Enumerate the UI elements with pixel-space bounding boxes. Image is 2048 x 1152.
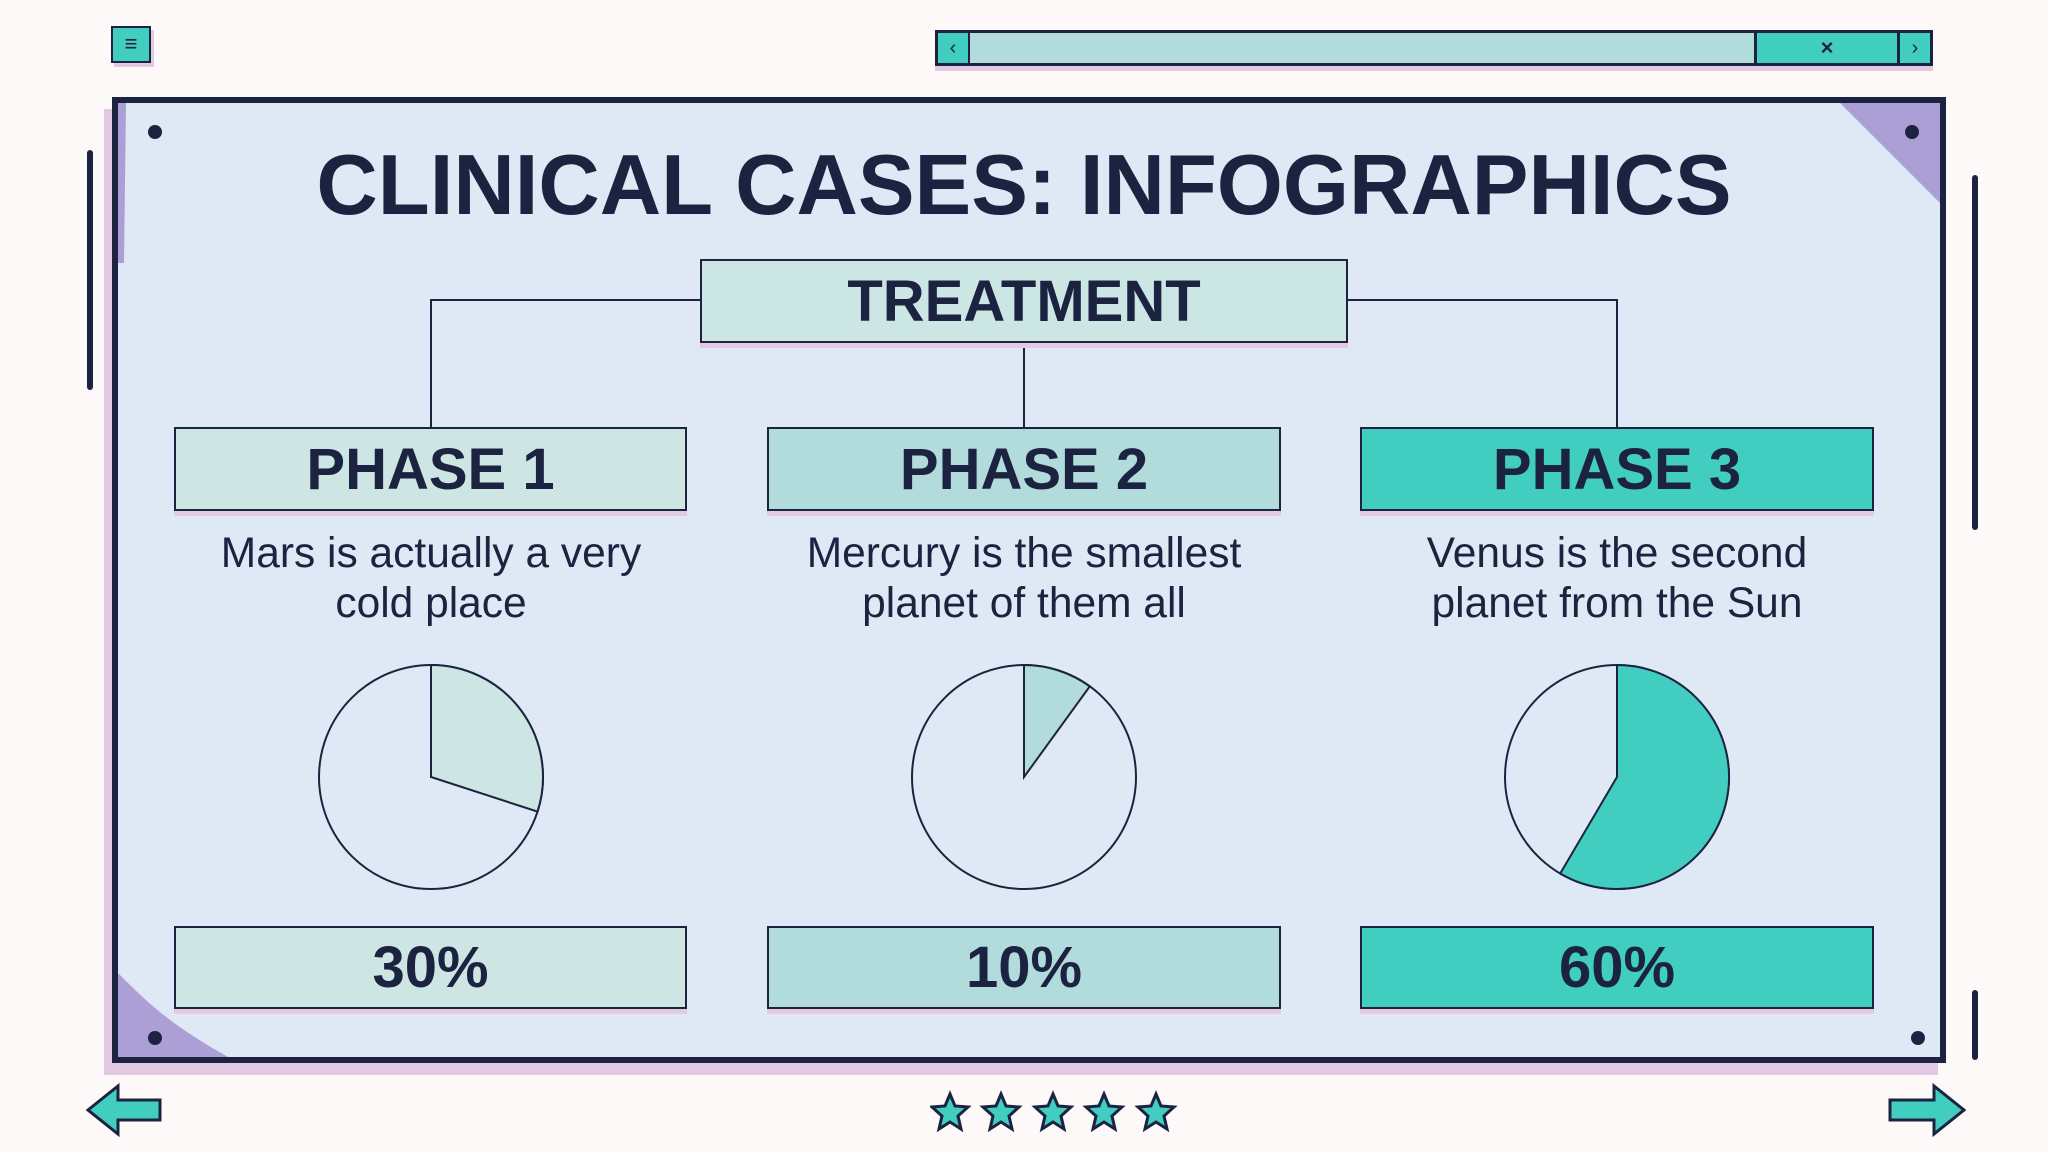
icon: right arrow xyxy=(1888,1083,1966,1138)
phase 3 header xyxy=(1360,427,1874,511)
value 30% xyxy=(174,926,687,1009)
pie chart 30% xyxy=(318,664,544,890)
phase 3 header: PHASE 3 xyxy=(1493,436,1741,502)
top window bar: › xyxy=(1912,37,1918,59)
phase 3 description: planet from the Sun xyxy=(1432,580,1802,627)
pie chart 60% xyxy=(1504,664,1730,890)
treatment box xyxy=(700,259,1348,343)
value 60%: 60% xyxy=(1559,935,1675,1000)
value 10%: 10% xyxy=(966,935,1082,1000)
icon: menu button: ≡ xyxy=(125,31,137,56)
value 60% xyxy=(1360,926,1874,1009)
phase 1 description: Mars is actually a very xyxy=(221,530,641,577)
phase 1 header: PHASE 1 xyxy=(306,436,555,502)
icon: left arrow xyxy=(86,1083,162,1138)
phase 1 description xyxy=(221,530,642,627)
phase 3 description: Venus is the second xyxy=(1427,530,1807,577)
panel: phase 3 xyxy=(1360,427,1874,1014)
phase 2 description: planet of them all xyxy=(862,580,1186,627)
phase 2 description: Mercury is the smallest xyxy=(807,530,1241,577)
top window bar: ‹ xyxy=(950,37,956,59)
treatment box: TREATMENT xyxy=(847,268,1201,334)
phase 1 description: cold place xyxy=(335,580,527,627)
title: CLINICAL CASES: INFOGRAPHICS xyxy=(316,138,1732,233)
panel: phase 1 xyxy=(174,427,687,1014)
top window bar: × xyxy=(1821,35,1833,60)
icon: stars rating xyxy=(930,1090,1178,1132)
main panel frame xyxy=(112,97,1946,1063)
panel: phase 2 xyxy=(767,427,1281,1014)
top window bar xyxy=(935,30,1933,66)
phase 2 header: PHASE 2 xyxy=(900,436,1148,502)
decorative side lines xyxy=(87,150,93,390)
value 10% xyxy=(767,926,1281,1009)
icon: menu button xyxy=(111,26,151,63)
phase 2 header xyxy=(767,427,1281,511)
phase 1 header xyxy=(174,427,687,511)
value 30%: 30% xyxy=(372,935,489,1000)
phase 2 description xyxy=(807,530,1241,627)
phase 3 description xyxy=(1427,530,1807,627)
pie chart 10% xyxy=(911,664,1137,890)
